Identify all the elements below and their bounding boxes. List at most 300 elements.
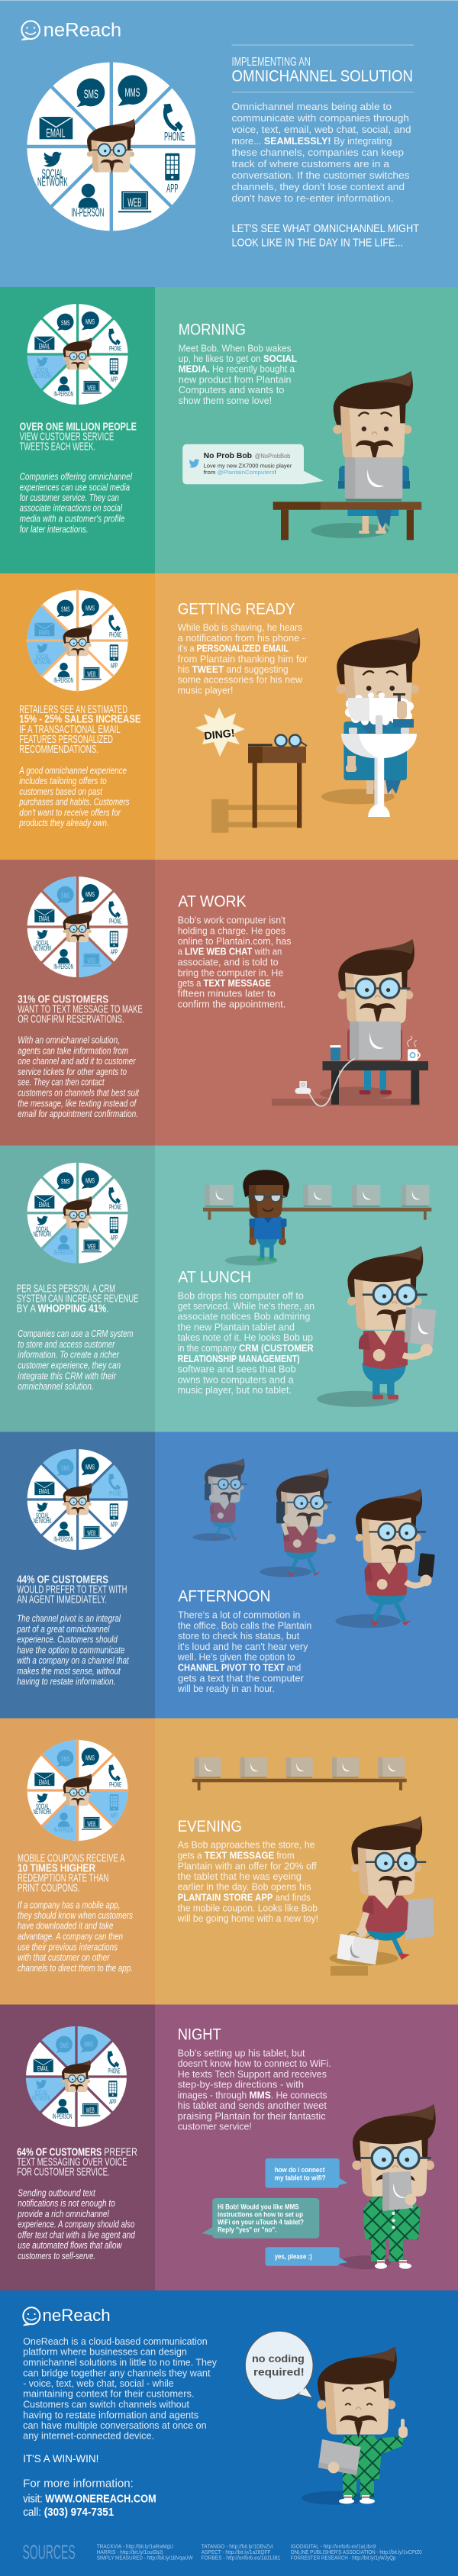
morning note: for customer service. They can — [20, 492, 119, 503]
intro body text: communicate with companies through — [232, 112, 409, 124]
night note: notifications is not enough to — [18, 2198, 115, 2209]
channel wheel: afternoon: SMS — [61, 1464, 69, 1472]
evening stat: 10 TIMES HIGHER — [18, 1862, 95, 1875]
channel wheel: evening: SMS — [61, 1755, 69, 1763]
channel wheel: main: PHONE — [164, 131, 185, 144]
channel wheel: afternoon: SOCIAL — [36, 1512, 49, 1519]
channel wheel: evening: WEB — [87, 1820, 95, 1828]
tweet bubble: @NoProbBob — [255, 453, 291, 460]
intro body text: channels, they don't lose context and — [232, 181, 405, 192]
at work story: Bob's work computer isn't — [178, 915, 286, 925]
afternoon note: The channel pivot is an integral — [17, 1613, 121, 1624]
ding burst: DING! — [204, 727, 235, 742]
footer description: can bridge together any channels they want — [23, 2368, 211, 2378]
channel wheel: night — [25, 2026, 127, 2128]
night story: doesn't know how to connect to WiFi. — [178, 2058, 331, 2069]
sources list: ASPECT - http://bit.ly/1a28QFF — [202, 2550, 270, 2555]
evening stat: MOBILE COUPONS RECEIVE A — [18, 1851, 124, 1864]
afternoon story: will be ready in an hour. — [177, 1683, 275, 1694]
afternoon story — [177, 1610, 311, 1694]
night note — [18, 2187, 136, 2261]
channel wheel: morning: NETWORK — [34, 372, 52, 379]
speech bubble: no coding required: required! — [253, 2366, 305, 2378]
panel: afternoon background — [0, 1432, 458, 1718]
at lunch stat: PER SALES PERSON, A CRM — [17, 1282, 115, 1295]
afternoon note: part of a great omnichannel — [16, 1624, 110, 1635]
contact details: visit: WWW.ONEREACH.COM — [23, 2494, 156, 2506]
channel wheel: night: APP — [109, 2098, 116, 2106]
afternoon note: makes the most sense, without — [17, 1666, 121, 1677]
evening note: channels to direct them to the app. — [18, 1963, 133, 1974]
night stat: 64% OF CUSTOMERS PREFER — [17, 2145, 137, 2158]
intro body text: conversation. If the customer switches — [232, 169, 410, 181]
chat bubble: support reply: Hi Bob! Would you like MMS — [218, 2203, 299, 2210]
night story: praising Plantain for their fantastic — [178, 2111, 326, 2122]
morning story: up, he likes to get on SOCIAL — [179, 353, 297, 364]
channel wheel: night: WEB — [86, 2106, 95, 2114]
channel wheel: night: NETWORK — [32, 2094, 50, 2102]
sources list: HARRIS - http://bit.ly/1ouGb2j — [97, 2550, 163, 2555]
getting ready story: music player! — [178, 686, 233, 696]
channel wheel: at work: EMAIL — [39, 915, 50, 922]
channel wheel: at work: MMS — [85, 891, 95, 899]
night story: images - through MMS. He connects — [178, 2090, 327, 2100]
chat bubble: support reply — [202, 2198, 319, 2239]
night story — [178, 2048, 331, 2132]
at lunch story: RELATIONSHIP MANAGEMENT) — [178, 1354, 300, 1364]
afternoon story: it's loud and he can't hear very — [178, 1641, 308, 1652]
at work story: associate, and is told to — [178, 957, 279, 967]
channel wheel: evening: PHONE — [109, 1780, 121, 1788]
footer description: platform where businesses can design — [23, 2347, 187, 2358]
speech bubble: no coding required — [245, 2331, 313, 2400]
getting ready stat: RECOMMENDATIONS. — [19, 743, 98, 756]
intro body text: track of where customers are in a — [232, 158, 390, 169]
channel wheel: evening: IN-PERSON — [53, 1826, 73, 1834]
channel wheel: morning: PHONE — [109, 344, 121, 352]
morning stat: OVER ONE MILLION PEOPLE — [20, 420, 137, 433]
channel wheel: morning: IN-PERSON — [53, 390, 73, 398]
getting ready story: it's a PERSONALIZED EMAIL — [178, 644, 289, 654]
panel: night background — [0, 2005, 458, 2290]
footer description: OneReach is a cloud-based communication — [23, 2336, 208, 2347]
channel wheel: getting ready: APP — [111, 662, 118, 670]
contact details — [23, 2478, 156, 2519]
chat bubble: support reply: instructions on how to set up — [218, 2210, 303, 2218]
intro call to action: LET'S SEE WHAT OMNICHANNEL MIGHT — [232, 223, 419, 235]
footer description — [23, 2336, 218, 2442]
channel wheel: morning: EMAIL — [39, 342, 50, 350]
channel wheel: afternoon: IN-PERSON — [53, 1535, 73, 1543]
at work story — [178, 915, 292, 1009]
channel wheel: evening — [26, 1739, 129, 1842]
at work heading: AT WORK — [178, 893, 247, 911]
afternoon story: well. He's given the option to — [177, 1652, 295, 1663]
footer description: can have multiple conversations at once on — [23, 2420, 207, 2431]
at lunch story: in the company CRM (CUSTOMER — [178, 1343, 314, 1354]
chat bubble: support reply: WiFi on your uTouch 4 tablet? — [218, 2218, 304, 2226]
morning story — [179, 343, 297, 406]
at lunch note: customer experience, they can — [18, 1361, 121, 1371]
channel wheel: getting ready: EMAIL — [39, 628, 50, 636]
afternoon note: experience. Customers should — [17, 1635, 118, 1645]
afternoon note — [16, 1613, 129, 1687]
character: Bob at desk — [273, 371, 421, 540]
at lunch stat: BY A WHOPPING 41%. — [17, 1303, 108, 1315]
evening note: with that customer on other — [18, 1952, 110, 1963]
chat bubble: customer question — [266, 2158, 347, 2188]
getting ready stat: IF A TRANSACTIONAL EMAIL — [19, 723, 121, 736]
getting ready note: includes tailoring offers to — [19, 776, 107, 786]
morning story: Computers and wants to — [179, 385, 284, 395]
afternoon story: There's a lot of commotion in — [178, 1610, 300, 1621]
getting ready story: from Plantain thanking him for — [178, 654, 308, 664]
afternoon stat: WOULD PREFER TO TEXT WITH — [17, 1583, 127, 1596]
panel: at work background — [0, 860, 458, 1146]
at work note: customers on channels that best suit — [18, 1087, 139, 1098]
morning story: show them some love! — [179, 395, 272, 406]
at lunch story: associate notices Bob admiring — [178, 1312, 310, 1322]
intro body text: don't have to re-enter information. — [232, 192, 394, 204]
at lunch note: information. To create a richer — [18, 1350, 120, 1361]
sources list: FORRESTER RESEARCH - http://bit.ly/1yWJyQp — [291, 2555, 396, 2561]
at lunch note: Companies can use a CRM system — [18, 1328, 133, 1339]
getting ready heading: GETTING READY — [178, 600, 295, 618]
panel: intro background — [0, 0, 458, 287]
evening stat — [18, 1851, 124, 1895]
channel wheel: main: SOCIAL — [41, 167, 63, 180]
at lunch heading: AT LUNCH — [178, 1268, 251, 1286]
channel wheel: getting ready: SMS — [61, 605, 69, 613]
intro body text — [232, 101, 411, 204]
morning note: media with a customer's profile — [20, 513, 124, 524]
panel: at lunch background — [0, 1145, 458, 1432]
laptop shelf — [203, 1185, 431, 1220]
character: Bob in pajamas with tablet — [339, 2104, 436, 2269]
intro body text: Omnichannel means being able to — [232, 101, 392, 112]
channel wheel: morning: WEB — [87, 384, 95, 392]
channel wheel: main: APP — [166, 182, 179, 195]
getting ready note: don't want to receive offers for — [19, 807, 121, 818]
channel wheel: at work: APP — [111, 948, 118, 956]
morning note: Companies offering omnichannel — [20, 471, 133, 482]
channel wheel: at lunch — [26, 1161, 129, 1264]
channel wheel: main: SMS — [84, 88, 98, 101]
channel wheel: getting ready: WEB — [87, 670, 95, 678]
evening note: advantage. A company can then — [18, 1932, 123, 1942]
character: Bob thumbs up — [302, 2346, 408, 2505]
tweet bubble: Love my new ZX7000 music player — [204, 462, 292, 469]
morning stat: VIEW CUSTOMER SERVICE — [20, 431, 114, 444]
afternoon stat: AN AGENT IMMEDIATELY. — [17, 1593, 107, 1606]
chat bubble: customer question: my tablet to wifi? — [275, 2174, 326, 2181]
getting ready story: some accessories for his new — [178, 675, 303, 686]
night story: customer service! — [178, 2122, 252, 2132]
panel: getting ready background — [0, 573, 458, 860]
channel wheel: night: SMS — [60, 2042, 69, 2049]
at work stat: WANT TO TEXT MESSAGE TO MAKE — [18, 1003, 143, 1016]
evening story — [177, 1840, 318, 1924]
character: Bob with phone, near — [335, 1489, 435, 1628]
channel wheel: getting ready — [26, 589, 129, 692]
panel: evening background — [0, 1718, 458, 2005]
ding burst — [195, 707, 245, 757]
night stat — [17, 2145, 137, 2179]
contact details: call: (303) 974-7351 — [23, 2507, 114, 2519]
channel wheel: at work: IN-PERSON — [53, 963, 73, 970]
channel wheel: afternoon: MMS — [85, 1464, 95, 1471]
channel wheel: evening: APP — [111, 1812, 118, 1819]
channel wheel: afternoon: APP — [111, 1521, 118, 1528]
night note: customers to self-serve. — [18, 2251, 95, 2261]
sources heading: SOURCES — [23, 2541, 76, 2564]
character: Bob with laptop at work — [272, 939, 428, 1106]
at work story: a LIVE WEB CHAT with an — [178, 947, 282, 957]
at work note: email for appointment confirmation. — [18, 1109, 138, 1119]
channel wheel: afternoon: PHONE — [109, 1490, 121, 1497]
logo: OneReach: neReach — [44, 21, 121, 41]
sources list: FORBES - http://onforb.es/1dJ1JB1 — [202, 2555, 280, 2561]
sources list: ONLINE PUBLISHER'S ASSOCIATION - http://bit.ly/1vCPtZ0 — [291, 2550, 422, 2555]
channel wheel: at lunch: EMAIL — [39, 1201, 50, 1209]
night story: his tablet and sends another tweet — [178, 2100, 327, 2111]
getting ready story: a notification from his phone - — [178, 633, 305, 644]
channel wheel: evening: MMS — [85, 1754, 95, 1762]
channel wheel: at lunch: APP — [111, 1235, 118, 1242]
evening story: Plantain with an offer for 20% off — [178, 1861, 317, 1871]
channel wheel: at work — [26, 876, 129, 978]
tweet bubble: No Prob Bob — [204, 452, 252, 460]
night stat: TEXT MESSAGING OVER VOICE — [17, 2156, 127, 2169]
channel wheel: at lunch: PHONE — [109, 1203, 121, 1211]
at lunch story — [178, 1290, 314, 1396]
channel wheel: evening: SOCIAL — [36, 1803, 49, 1810]
character: Bob on phone, middle — [260, 1468, 336, 1577]
channel wheel: morning: MMS — [85, 318, 95, 326]
night note: offer text chat with a live agent and — [18, 2229, 136, 2240]
afternoon note: have the option to communicate — [17, 1645, 124, 1655]
intro title: OMNICHANNEL SOLUTION — [232, 67, 413, 86]
footer description: omnichannel solutions in little to no time. They — [23, 2357, 218, 2368]
channel wheel: at lunch: IN-PERSON — [53, 1248, 73, 1256]
intro body text: these channels, companies can keep — [232, 147, 404, 158]
channel wheel: night: SOCIAL — [34, 2089, 48, 2097]
channel wheel: afternoon: NETWORK — [34, 1517, 52, 1525]
at work stat: OR CONFIRM RESERVATIONS. — [18, 1012, 124, 1025]
at lunch story: music player, but no tablet. — [178, 1385, 292, 1396]
footer description: - voice, text, web chat, social - while — [23, 2378, 174, 2389]
channel wheel: main: EMAIL — [47, 127, 66, 140]
morning note — [20, 471, 133, 534]
sources list: IGODIGITAL - http://onforb.es/1aLibn9 — [291, 2544, 376, 2549]
chat bubble: support reply: Reply "yes" or "no". — [218, 2226, 276, 2234]
win-win line: IT'S A WIN-WIN! — [23, 2452, 98, 2465]
at work note: the message, like texting instead of — [18, 1098, 137, 1109]
evening note: If a company has a mobile app, — [18, 1900, 120, 1910]
channel wheel: at work: PHONE — [109, 917, 121, 925]
morning note: for later interactions. — [20, 524, 89, 534]
channel wheel: at lunch: MMS — [85, 1177, 95, 1184]
tweet bubble — [182, 444, 324, 484]
channel wheel: getting ready: SOCIAL — [36, 653, 49, 660]
intro call to action: LOOK LIKE IN THE DAY IN THE LIFE... — [232, 237, 403, 250]
morning story: Meet Bob. When Bob wakes — [179, 343, 292, 353]
channel wheel: at work: SMS — [61, 892, 69, 899]
intro body text: voice, text, email, web chat, social, and — [232, 124, 411, 135]
intro body text: more... SEAMLESSLY! By integrating — [232, 135, 392, 147]
channel wheel: at lunch: SMS — [61, 1178, 69, 1186]
morning story: MEDIA. He recently bought a — [179, 364, 295, 375]
intro title: IMPLEMENTING AN — [232, 56, 311, 69]
at lunch note: to store and access customer — [18, 1339, 115, 1350]
night note: experience. A company should also — [18, 2219, 134, 2230]
channel wheel: night: MMS — [85, 2041, 93, 2048]
sources list: SIMPLY MEASURED - http://bit.ly/1BVqaUW — [97, 2555, 193, 2561]
getting ready note: A good omnichannel experience — [19, 765, 127, 776]
channel wheel: morning: APP — [111, 376, 118, 383]
evening story: earlier in the day. Bob opens his — [178, 1882, 311, 1893]
afternoon stat: 44% OF CUSTOMERS — [17, 1573, 108, 1586]
intro call to action — [232, 223, 419, 250]
afternoon note: with a company on a channel that — [17, 1655, 129, 1666]
at lunch story: software and sees that Bob — [178, 1364, 296, 1375]
at work note: service tickets for other agents to — [18, 1067, 127, 1077]
at lunch note: integrate this CRM with their — [18, 1370, 117, 1381]
night note: provide a rich omnichannel — [18, 2209, 110, 2219]
afternoon story: gets a text that the computer — [178, 1673, 304, 1683]
channel wheel: main: WEB — [127, 196, 142, 209]
channel wheel: main — [25, 60, 197, 233]
at lunch story: owns two computers and a — [178, 1374, 294, 1385]
at lunch note: omnichannel solution. — [18, 1381, 94, 1392]
channel wheel: getting ready: IN-PERSON — [53, 676, 73, 684]
night story: He texts Tech Support and receives — [178, 2069, 327, 2080]
speech bubble: no coding required: no coding — [252, 2352, 305, 2365]
channel wheel: at work: NETWORK — [34, 944, 52, 952]
getting ready note — [19, 765, 129, 828]
morning stat: TWEETS EACH WEEK. — [20, 440, 95, 453]
panel: footer background — [0, 2290, 458, 2576]
channel wheel: at work: WEB — [87, 957, 95, 964]
night note: Sending outbound text — [18, 2187, 95, 2198]
at work story: online to Plantain.com, has — [178, 936, 292, 947]
laptop shelf — [192, 1758, 407, 1790]
night stat: FOR CUSTOMER SERVICE. — [17, 2166, 110, 2179]
afternoon story: CHANNEL PIVOT TO TEXT and — [178, 1662, 301, 1673]
at lunch story: the new Plantain tablet and — [178, 1322, 295, 1332]
morning story: new product from Plantain — [179, 374, 292, 385]
getting ready note: products they already own. — [19, 818, 109, 828]
afternoon note: having to restate information. — [17, 1677, 116, 1687]
evening story: As Bob approaches the store, he — [178, 1840, 315, 1851]
getting ready story — [178, 622, 308, 696]
channel wheel: night: IN-PERSON — [53, 2113, 72, 2120]
at work note: see. They can then contact — [18, 1077, 105, 1088]
night story: Bob's setting up his tablet, but — [178, 2048, 305, 2058]
channel wheel: at work: SOCIAL — [36, 939, 49, 947]
sources list: TATANGO - http://bit.ly/1DBvZvt — [202, 2544, 273, 2549]
evening heading: EVENING — [178, 1818, 242, 1835]
at work note: one channel and add it to customer — [18, 1056, 136, 1067]
getting ready story: While Bob is shaving, he hears — [178, 622, 302, 633]
getting ready stat: RETAILERS SEE AN ESTIMATED — [19, 703, 127, 716]
chat bubble: customer answer: yes, please :) — [275, 2253, 312, 2261]
contact details: For more information: — [23, 2478, 134, 2490]
evening story: gets a TEXT MESSAGE from — [178, 1851, 295, 1861]
getting ready stat: FEATURES PERSONALIZED — [19, 733, 113, 746]
night story: step-by-step directions - with — [178, 2080, 304, 2090]
channel wheel: morning — [26, 303, 129, 405]
getting ready note: purchases and habits. Customers — [19, 797, 130, 808]
evening story: PLANTAIN STORE APP and finds — [178, 1893, 311, 1903]
at lunch story: get serviced. While he's there, an — [178, 1301, 314, 1312]
evening note: have downloaded it and take — [18, 1921, 114, 1932]
at work note — [18, 1035, 139, 1119]
channel wheel: at lunch: SOCIAL — [36, 1225, 49, 1233]
morning note: associate interactions on social — [20, 503, 123, 514]
channel wheel: morning: SOCIAL — [36, 366, 49, 374]
sources list: TRACKVIA - http://bit.ly/1aRwMgU — [97, 2544, 173, 2549]
afternoon story: the office. Bob calls the Plantain — [178, 1620, 311, 1631]
character: Bob with shopping bag — [330, 1816, 434, 1976]
at work story: confirm the appointment. — [178, 999, 285, 1009]
at work stat: 31% OF CUSTOMERS — [18, 993, 108, 1006]
afternoon story: store to check his status, but — [178, 1631, 300, 1641]
at work note: agents can take information from — [18, 1045, 128, 1056]
channel wheel: getting ready: NETWORK — [34, 658, 52, 666]
evening stat: PRINT COUPONS. — [18, 1882, 79, 1895]
channel wheel: afternoon: EMAIL — [39, 1487, 50, 1495]
channel wheel: at lunch: WEB — [87, 1243, 95, 1251]
channel wheel: evening: EMAIL — [39, 1778, 50, 1786]
getting ready stat — [19, 703, 140, 756]
night note: use automated flows that allow — [18, 2240, 122, 2251]
footer description: having to restate information and agents — [23, 2410, 198, 2420]
evening story: the tablet that he was eyeing — [178, 1871, 302, 1882]
character: Bob on phone, far — [192, 1458, 247, 1541]
channel wheel: afternoon — [26, 1448, 129, 1551]
character: Bob shaving at sink — [321, 628, 420, 817]
character: Bob admiring tablet — [317, 1246, 436, 1407]
channel wheel: getting ready: MMS — [85, 605, 95, 612]
character: store associate — [225, 1170, 289, 1266]
channel wheel: at lunch: NETWORK — [34, 1231, 52, 1238]
at work story: bring the computer in. He — [178, 967, 283, 978]
at work story: fifteen minutes later to — [178, 989, 276, 999]
channel wheel: main: MMS — [124, 86, 140, 99]
getting ready note: customers based on past — [19, 786, 102, 797]
tweet bubble: from @PlantainComputers ! — [204, 469, 276, 476]
evening note — [18, 1900, 133, 1974]
at work note: With an omnichannel solution, — [18, 1035, 120, 1046]
evening story: the mobile coupon. Looks like Bob — [178, 1903, 318, 1913]
footer description: Customers can switch channels without — [23, 2399, 190, 2410]
sources list — [97, 2544, 422, 2561]
getting ready story: his TWEET and suggesting — [178, 664, 289, 675]
chat bubble: customer answer — [266, 2247, 347, 2266]
logo: OneReach footer: neReach — [43, 2306, 111, 2325]
afternoon stat — [17, 1573, 127, 1606]
at lunch story: Bob drops his computer off to — [178, 1290, 304, 1301]
side table with phone and glasses — [211, 734, 307, 833]
at lunch story: takes note of it. He looks Bob up — [178, 1332, 313, 1343]
channel wheel: morning: SMS — [61, 319, 69, 327]
morning stat — [20, 420, 137, 453]
footer description: maintaining context for their customers. — [23, 2389, 194, 2400]
at lunch note — [18, 1328, 133, 1392]
panel: morning background — [0, 287, 458, 573]
channel wheel: main: IN-PERSON — [72, 207, 104, 220]
